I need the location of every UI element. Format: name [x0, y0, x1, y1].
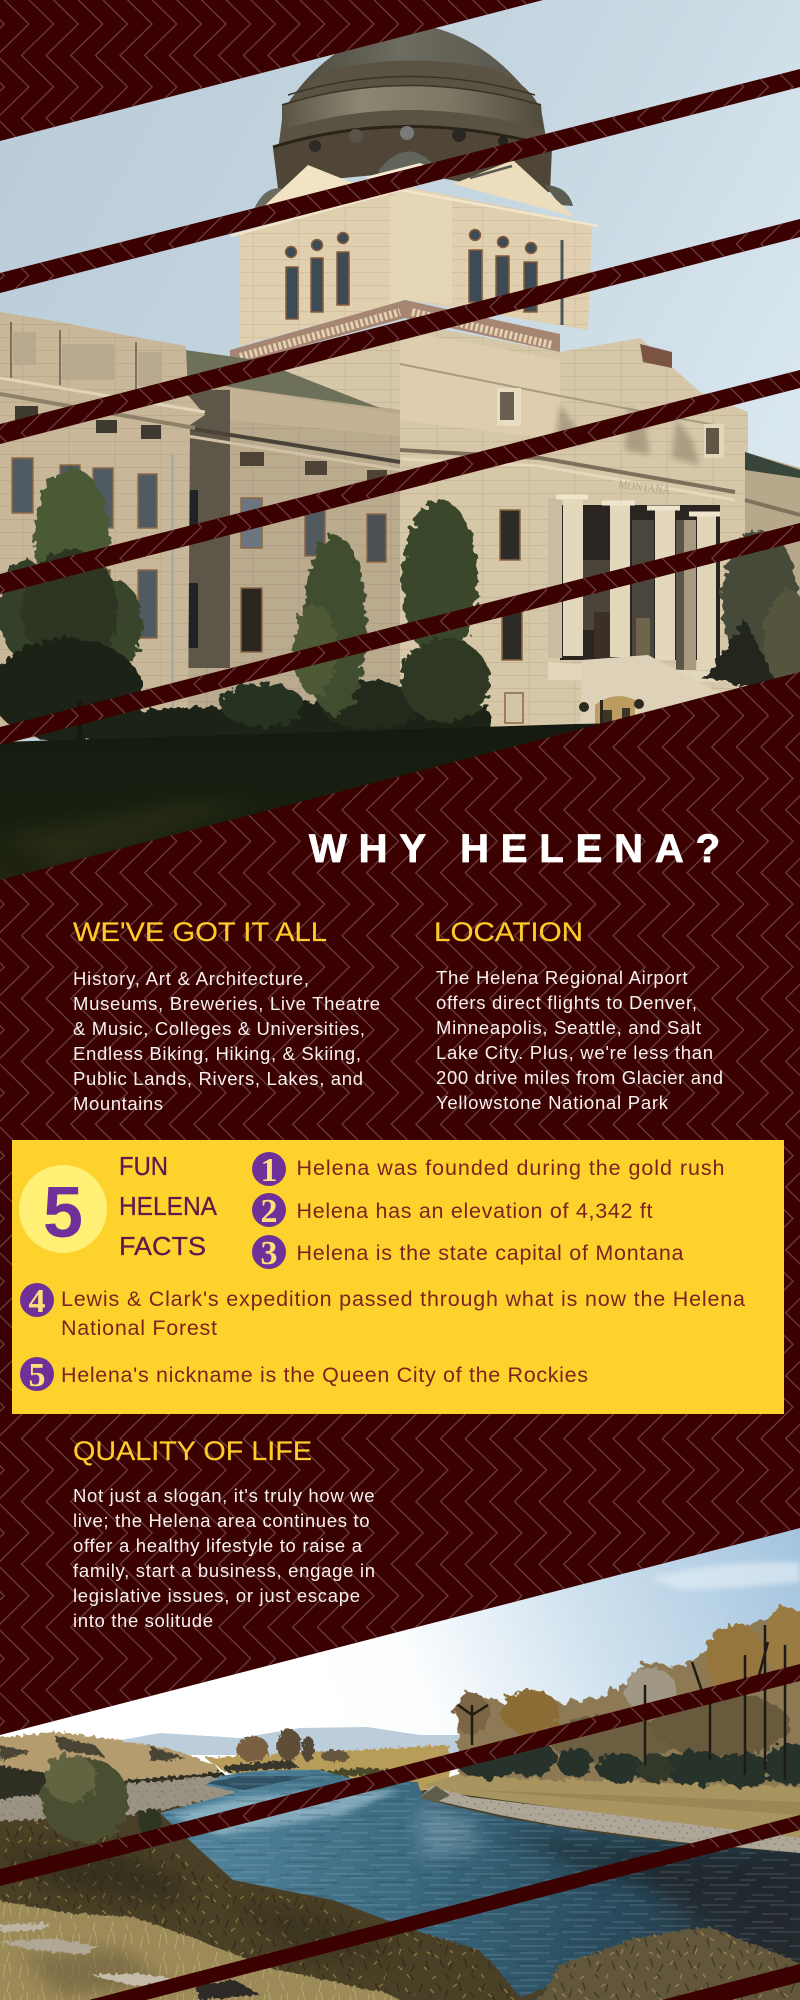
icon: big number 5: 5: [43, 1173, 83, 1253]
diagonal band 6: [89, 1815, 800, 2000]
text block: location: Lake City. Plus, we're less than: [436, 1042, 713, 1063]
tree: far left: [0, 468, 142, 742]
icon: capitol dome: [253, 23, 573, 212]
top corner band: [0, 0, 543, 141]
tree: center-left: [293, 535, 367, 715]
fact 4: Lewis & Clark's expedition passed through what is now the Helena: [61, 1287, 745, 1311]
icon: louvre vents: [497, 388, 724, 458]
fact 4: 4: [28, 1283, 46, 1320]
fact 1: Helena was founded during the gold rush: [296, 1156, 724, 1180]
fact 1: [252, 1152, 724, 1189]
left foreground brush: [0, 1818, 800, 2000]
heading: fun helena facts: HELENA: [119, 1191, 218, 1221]
trees: [0, 468, 800, 750]
photo: river landscape: [0, 1500, 800, 2000]
diagonal band 3: [0, 370, 800, 594]
text block: we've got it all: Endless Biking, Hiking, & Skiing,: [73, 1043, 361, 1064]
window group: left wing: [12, 458, 157, 638]
text block: quality of life: into the solitude: [73, 1610, 213, 1631]
distant trees and yellow field: [205, 1729, 450, 1790]
engraved inscription: MONTANA: [618, 477, 671, 497]
panel: five fun facts: [12, 1140, 784, 1414]
text block: quality of life: offer a healthy lifestyle to raise a: [73, 1535, 363, 1556]
shrubs along the base: [220, 681, 420, 729]
small pine on left bank: [41, 1754, 162, 1842]
heading: fun helena facts: [119, 1151, 218, 1261]
grass below the brush: [0, 1890, 400, 2000]
building: left wing: [0, 312, 205, 740]
balustrade: [230, 300, 560, 366]
heading: location: LOCATION: [434, 917, 583, 947]
stair and entry door: [579, 655, 730, 735]
distant mountains: [110, 1727, 470, 1755]
brush masses: [0, 1818, 800, 2000]
icon: big number 5: [19, 1165, 107, 1253]
dark hedge at the building base: [95, 700, 490, 750]
text block: we've got it all: Public Lands, Rivers, Lakes, and: [73, 1068, 363, 1089]
text block: location: Yellowstone National Park: [436, 1092, 669, 1113]
fact 2: [252, 1193, 653, 1230]
building: far right wing: [745, 452, 800, 700]
text block: we've got it all: [73, 968, 380, 1114]
tree: center: [401, 500, 489, 722]
fact 5: Helena's nickname is the Queen City of the Rockies: [61, 1363, 588, 1387]
fact 1: 1: [260, 1152, 278, 1189]
text block: location: The Helena Regional Airport: [436, 967, 688, 988]
left hills: [0, 1732, 238, 1837]
text block: location: [436, 967, 723, 1113]
evergreen band: [458, 1740, 800, 1787]
text block: quality of life: [73, 1485, 375, 1631]
title: WHY HELENA?: [309, 827, 720, 871]
text block: quality of life: family, start a business, engage in: [73, 1560, 375, 1581]
window group: tower: [286, 230, 537, 319]
diagonal band 1: [0, 69, 800, 293]
heading: fun helena facts: FUN: [119, 1151, 168, 1181]
lawn: [0, 720, 800, 890]
heading: we've got it all: WE'VE GOT IT ALL: [73, 917, 327, 947]
fact 3: 3: [260, 1235, 278, 1272]
icon: capitol tower: [230, 160, 598, 366]
diagonal band 5: [0, 1664, 800, 1886]
text block: we've got it all: Mountains: [73, 1093, 163, 1114]
fact 3: Helena is the state capital of Montana: [296, 1241, 684, 1265]
photo: Montana State Capitol: [0, 0, 800, 890]
diagonal band 2: [0, 219, 800, 444]
text block: we've got it all: & Music, Colleges & Universities,: [73, 1018, 365, 1039]
diagonal band 7: [662, 1964, 800, 2000]
tree: right: [702, 530, 800, 690]
text block: location: offers direct flights to Denver,: [436, 992, 697, 1013]
window group: main block: [500, 510, 523, 723]
building: right main block: [225, 322, 760, 735]
ground base under the scene: [0, 1790, 800, 2000]
text block: quality of life: Not just a slogan, it's truly how we: [73, 1485, 374, 1506]
main content panel: [0, 672, 800, 1735]
tree trunks: [458, 1625, 785, 1780]
diagonal band 4: [0, 523, 800, 745]
heading: fun helena facts: FACTS: [119, 1231, 206, 1261]
text block: location: Minneapolis, Seattle, and Salt: [436, 1017, 701, 1038]
fact 2: 2: [260, 1193, 278, 1230]
forest on far bank: [455, 1606, 800, 1788]
rocks: [0, 1923, 260, 2000]
fact 5: [20, 1357, 588, 1394]
text block: location: 200 drive miles from Glacier and: [436, 1067, 723, 1088]
text block: we've got it all: Museums, Breweries, Live Theatre: [73, 993, 380, 1014]
portico with columns: [548, 477, 720, 682]
text block: quality of life: legislative issues, or just escape: [73, 1585, 360, 1606]
fact 5: 5: [28, 1357, 46, 1394]
building: mid wing and roof: [185, 350, 400, 740]
fact 4: [20, 1283, 745, 1340]
river water: [150, 1760, 800, 2000]
fact 2: Helena has an elevation of 4,342 ft: [296, 1199, 653, 1223]
fact 4: National Forest: [61, 1316, 217, 1340]
right bank with gravel: [420, 1772, 800, 1853]
fact 3: [252, 1235, 684, 1272]
heading: quality of life: QUALITY OF LIFE: [73, 1436, 312, 1466]
text block: quality of life: live; the Helena area continues to: [73, 1510, 370, 1531]
text block: we've got it all: History, Art & Architecture,: [73, 968, 309, 989]
